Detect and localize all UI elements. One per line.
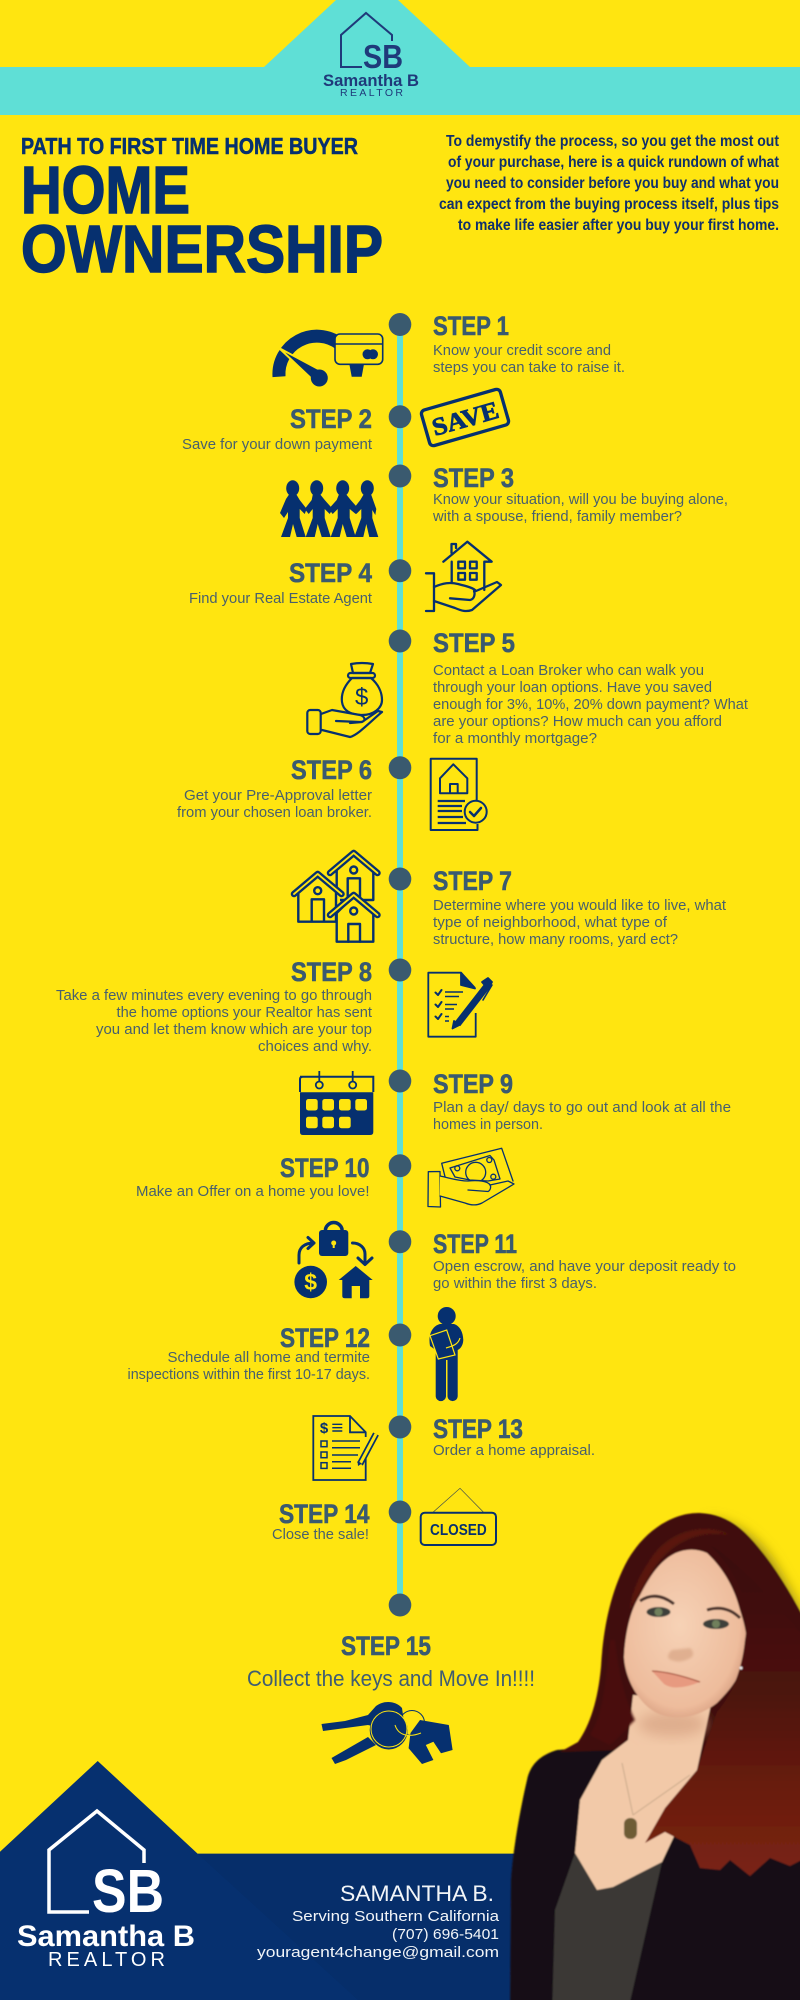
agent portrait — [510, 1513, 800, 2000]
step 12 text: Schedule all home and termite — [168, 1349, 370, 1366]
step 1 heading: STEP 1 — [433, 311, 509, 341]
footer band — [0, 1761, 520, 2000]
icon: invoice and pencil — [313, 1416, 376, 1480]
step 13 — [313, 1414, 595, 1480]
step 15 — [247, 1631, 535, 1764]
icon: cash on hand — [428, 1148, 514, 1207]
step 4 text: Find your Real Estate Agent — [189, 590, 373, 607]
title line 1: HOME — [21, 153, 190, 228]
title block — [21, 133, 383, 287]
phone: (707) 696-5401 — [392, 1926, 499, 1943]
service area: Serving Southern California — [292, 1908, 500, 1925]
step 11 text: Open escrow, and have your deposit ready to — [433, 1258, 736, 1275]
step 5 heading: STEP 5 — [433, 628, 515, 658]
logo name: Samantha B — [323, 71, 419, 90]
step 1 text: steps you can take to raise it. — [433, 359, 625, 376]
step 3 text: with a spouse, friend, family member? — [432, 508, 682, 525]
icon: keys with house keychain — [322, 1702, 453, 1764]
logo house outline — [341, 13, 392, 67]
step 2 text: Save for your down payment — [182, 436, 373, 453]
kicker heading: PATH TO FIRST TIME HOME BUYER — [21, 133, 358, 159]
step 9 text — [433, 1099, 731, 1133]
icon: lock, money and house exchange — [294, 1223, 373, 1298]
step 13 text: Order a home appraisal. — [433, 1442, 595, 1459]
logo subtitle: REALTOR — [340, 87, 403, 99]
step 10 heading: STEP 10 — [280, 1153, 370, 1183]
step 5 text: are your options? How much can you afford — [433, 713, 722, 730]
icon: invoice and pencil: $ — [320, 1420, 329, 1437]
step 7 — [294, 853, 727, 948]
step 14 — [272, 1488, 496, 1545]
footer logo monogram: SB — [92, 1857, 164, 1925]
title line 2: OWNERSHIP — [21, 212, 383, 287]
footer logo subtitle: REALTOR — [48, 1949, 165, 1971]
icon: checklist and pen — [428, 973, 492, 1037]
icon: closed sign — [421, 1488, 496, 1545]
step 8 text: Take a few minutes every evening to go through — [56, 987, 372, 1004]
step 14 heading: STEP 14 — [279, 1499, 370, 1529]
icon: house on hand — [426, 542, 501, 611]
step 7 text: structure, how many rooms, yard ect? — [433, 931, 678, 948]
footer logo house outline — [49, 1811, 144, 1912]
step 8 text: the home options your Realtor has sent — [116, 1004, 373, 1021]
step 8 text: you and let them know which are your top — [96, 1021, 372, 1038]
agent name: SAMANTHA B. — [340, 1881, 494, 1906]
icon: inspector with clipboard — [429, 1307, 463, 1401]
step 2 heading: STEP 2 — [290, 404, 372, 434]
header banner — [0, 0, 800, 115]
step 11 text: go within the first 3 days. — [433, 1275, 597, 1292]
icon: save stamp: SAVE — [429, 397, 502, 442]
step 8 text: choices and why. — [258, 1038, 372, 1055]
step 9 heading: STEP 9 — [433, 1069, 513, 1099]
step 9 text: homes in person. — [433, 1116, 543, 1133]
step 6 text: from your chosen loan broker. — [177, 804, 372, 821]
step 6 text: Get your Pre-Approval letter — [184, 787, 372, 804]
step 9 text: Plan a day/ days to go out and look at all the — [433, 1099, 731, 1116]
step 7 heading: STEP 7 — [433, 866, 512, 896]
icon: people holding hands — [280, 480, 378, 537]
timeline — [389, 313, 411, 1616]
step 10 text: Make an Offer on a home you love! — [136, 1183, 370, 1200]
contact details — [257, 1881, 500, 1961]
step 15 text: Collect the keys and Move In!!!! — [247, 1666, 535, 1691]
step 5 text: through your loan options. Have you saved — [433, 679, 712, 696]
step 12 text: inspections within the first 10-17 days. — [128, 1366, 370, 1383]
step 5 text: Contact a Loan Broker who can walk you — [433, 662, 704, 679]
icon: calendar — [300, 1071, 373, 1135]
step 5 text: enough for 3%, 10%, 20% down payment? What — [433, 696, 749, 713]
step 5 text: for a monthly mortgage? — [433, 730, 597, 747]
step 8 heading: STEP 8 — [291, 957, 372, 987]
step 1 text — [433, 342, 625, 376]
step 14 text: Close the sale! — [272, 1526, 369, 1543]
step 13 heading: STEP 13 — [433, 1414, 523, 1444]
footer logo — [17, 1811, 195, 1971]
step 3 text: Know your situation, will you be buying alone, — [433, 491, 728, 508]
step 6 heading: STEP 6 — [291, 755, 372, 785]
step 12 text — [128, 1349, 370, 1383]
footer logo name: Samantha B — [17, 1920, 195, 1953]
icon: approved document — [431, 759, 487, 830]
icon: money bag on hand — [307, 663, 382, 737]
icon: closed sign: CLOSED — [430, 1522, 487, 1539]
step 11 text — [433, 1258, 736, 1292]
step 4 — [189, 542, 501, 611]
step 11 — [294, 1223, 736, 1298]
step 3 heading: STEP 3 — [433, 463, 514, 493]
logo monogram: SB — [363, 38, 403, 75]
step 15 heading: STEP 15 — [341, 1631, 431, 1661]
step 11 heading: STEP 11 — [433, 1229, 517, 1259]
step 3 — [280, 463, 728, 537]
step 5 — [307, 628, 749, 747]
step 12 heading: STEP 12 — [280, 1323, 370, 1353]
step 7 text: Determine where you would like to live, what — [433, 897, 727, 914]
step 1 — [279, 311, 625, 386]
step 9 — [300, 1069, 731, 1135]
step 12 — [128, 1307, 463, 1401]
icon: lock, money and house exchange: $ — [304, 1269, 317, 1295]
step 7 text: type of neighborhood, what type of — [433, 914, 668, 931]
icon: credit score gauge and card — [279, 334, 383, 386]
step 1 text: Know your credit score and — [433, 342, 611, 359]
step 6 text — [177, 787, 372, 821]
intro text — [439, 133, 779, 234]
step 6 — [177, 755, 487, 830]
step 8 text — [56, 987, 373, 1055]
step 2 — [182, 388, 510, 453]
header logo — [323, 13, 419, 99]
icon: save stamp — [420, 388, 510, 447]
step 7 text — [433, 897, 727, 948]
step 3 text — [432, 491, 728, 525]
step 8 — [56, 957, 492, 1055]
step 5 text — [433, 662, 749, 747]
email: youragent4change@gmail.com — [257, 1944, 499, 1961]
step 4 heading: STEP 4 — [289, 558, 372, 588]
step 10 — [136, 1148, 514, 1207]
icon: money bag on hand: $ — [355, 684, 368, 711]
icon: three houses — [294, 853, 378, 942]
